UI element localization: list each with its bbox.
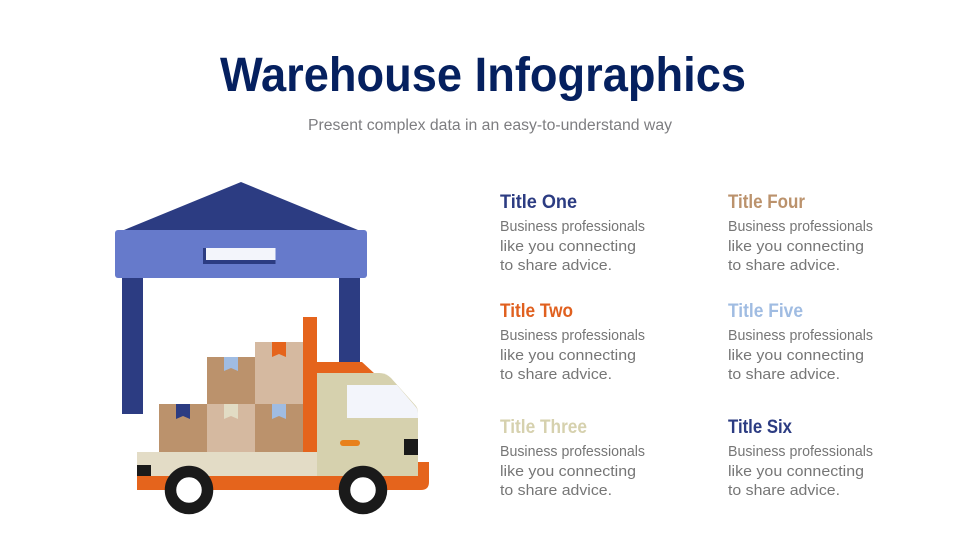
item: title four — [728, 192, 873, 274]
ribbon: light blue — [272, 404, 286, 419]
description: to share advice. — [500, 257, 612, 274]
delivery truck — [137, 317, 429, 508]
illustration: warehouse gate and delivery truck — [115, 182, 429, 508]
box: bottom right — [255, 404, 303, 452]
tail light — [137, 465, 151, 476]
description — [728, 443, 873, 499]
box: bottom middle — [207, 404, 255, 452]
title: Warehouse Infographics — [220, 49, 746, 102]
description: Business professionals — [500, 327, 645, 344]
right post — [339, 276, 360, 366]
box: top right — [255, 342, 303, 404]
subtitle: Present complex data in an easy-to-understand way — [308, 117, 672, 134]
item: title one — [500, 192, 645, 274]
description: like you connecting — [500, 347, 636, 364]
chassis and bumper — [137, 462, 429, 490]
cargo boxes — [159, 342, 303, 452]
description: Business professionals — [728, 327, 873, 344]
door handle — [340, 440, 360, 446]
front wheel — [344, 472, 382, 508]
description: to share advice. — [500, 482, 612, 499]
description: like you connecting — [728, 463, 864, 480]
item: title two — [500, 301, 645, 383]
description — [728, 218, 873, 274]
heading: Title Two — [500, 301, 573, 322]
orange cab roof — [316, 362, 375, 374]
orange mast — [303, 317, 317, 452]
description: to share advice. — [728, 257, 840, 274]
sign — [203, 248, 276, 264]
item: title five — [728, 301, 873, 383]
headlight — [404, 439, 418, 455]
heading: Title Six — [728, 417, 792, 438]
ribbon: cream — [224, 404, 238, 419]
beam — [115, 230, 367, 278]
description: to share advice. — [728, 366, 840, 383]
heading: Title Five — [728, 301, 803, 322]
rear wheel — [170, 472, 208, 508]
item: title three — [500, 417, 645, 499]
description: like you connecting — [500, 238, 636, 255]
description: like you connecting — [728, 238, 864, 255]
flatbed — [137, 452, 317, 476]
description: Business professionals — [500, 443, 645, 460]
description — [500, 443, 645, 499]
description: Business professionals — [728, 443, 873, 460]
ribbon: navy — [176, 404, 190, 419]
cab window — [347, 385, 418, 418]
left post — [122, 276, 143, 414]
description — [728, 327, 873, 383]
ribbon: light blue top — [224, 357, 238, 371]
warehouse gate — [115, 182, 367, 414]
box: bottom left — [159, 404, 207, 452]
description: to share advice. — [728, 482, 840, 499]
heading: Title One — [500, 192, 577, 213]
description — [500, 327, 645, 383]
item: title six — [728, 417, 873, 499]
ribbon: orange — [272, 342, 286, 357]
heading: Title Three — [500, 417, 587, 438]
description: like you connecting — [500, 463, 636, 480]
roof — [124, 182, 358, 230]
heading: Title Four — [728, 192, 806, 213]
description: Business professionals — [728, 218, 873, 235]
cab — [317, 373, 418, 476]
description: to share advice. — [500, 366, 612, 383]
box: top middle — [207, 357, 255, 404]
description: Business professionals — [500, 218, 645, 235]
description: like you connecting — [728, 347, 864, 364]
description — [500, 218, 645, 274]
